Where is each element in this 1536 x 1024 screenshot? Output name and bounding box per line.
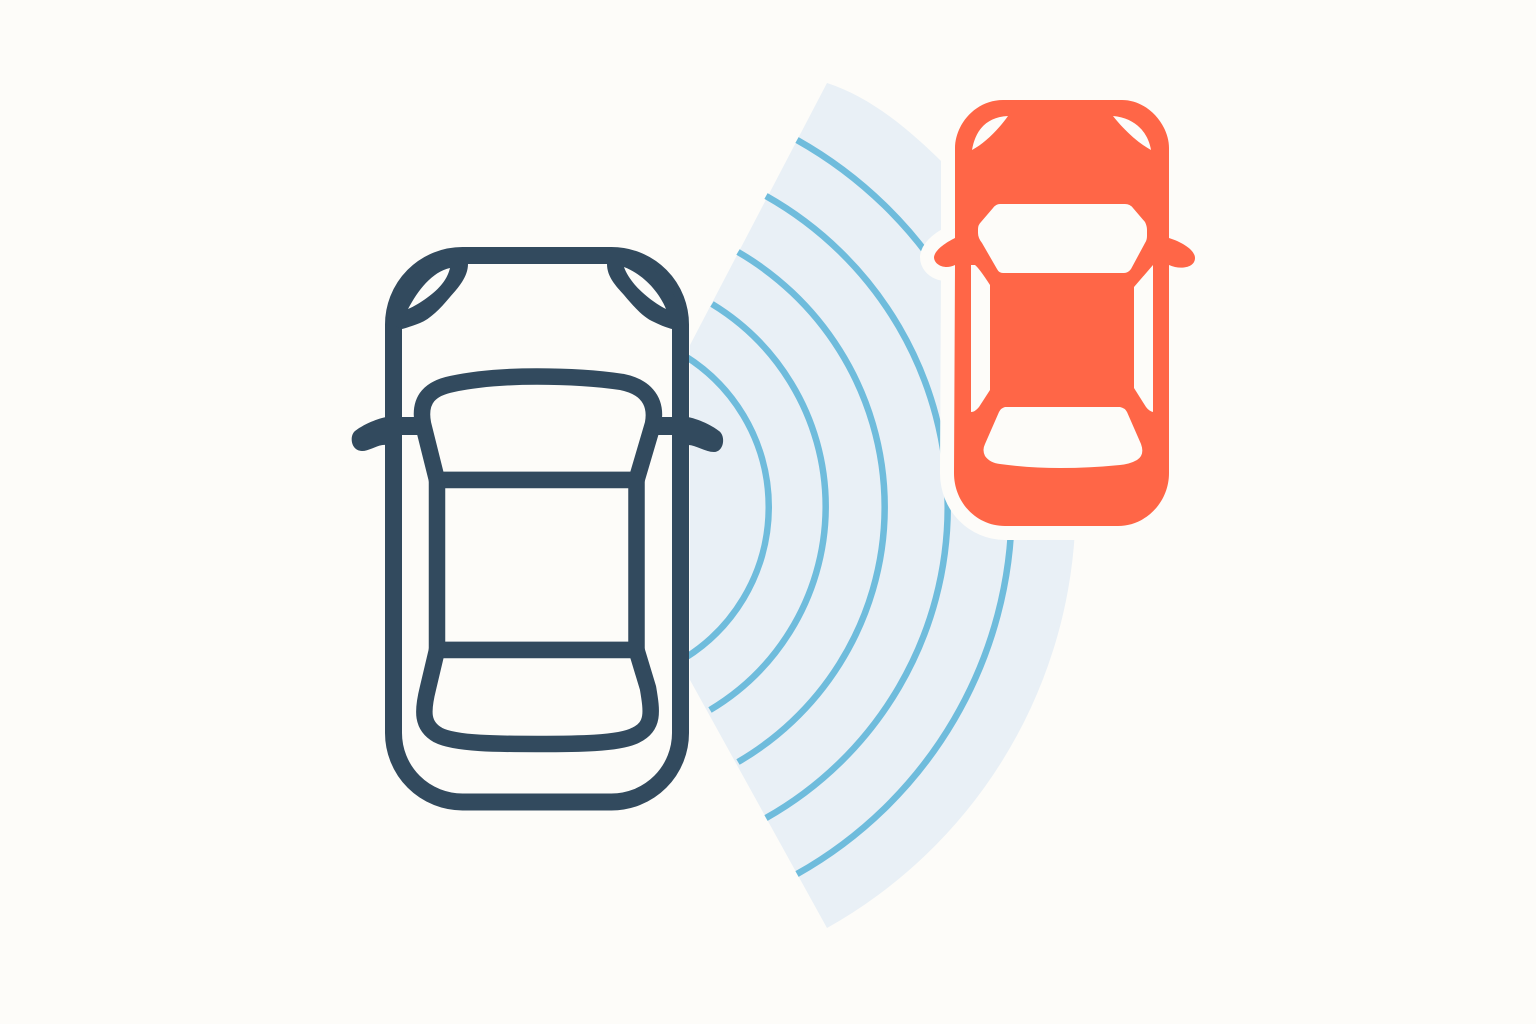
left headlight bbox=[393, 256, 468, 329]
left side window bbox=[971, 265, 990, 412]
car body outline bbox=[393, 256, 681, 802]
cabin roof bbox=[437, 480, 636, 650]
right side window bbox=[1134, 265, 1153, 412]
arc 1 bbox=[685, 356, 769, 658]
right headlight bbox=[607, 256, 681, 329]
rear window bbox=[424, 650, 651, 744]
right mirror bbox=[656, 417, 723, 452]
icon: red car bbox=[934, 100, 1195, 526]
left headlight bbox=[972, 116, 1008, 150]
icon: dark outlined car bbox=[352, 256, 723, 802]
red car body bbox=[934, 100, 1195, 526]
windshield bbox=[978, 204, 1147, 273]
arc 2 bbox=[710, 304, 826, 710]
arc 5 bbox=[797, 140, 1012, 874]
rear window bbox=[984, 407, 1142, 468]
left mirror bbox=[352, 417, 418, 451]
right headlight bbox=[1113, 116, 1151, 150]
windshield bbox=[422, 376, 654, 480]
panel: sensor coverage sector bbox=[690, 83, 1075, 928]
sensor wave arcs bbox=[685, 140, 1012, 874]
arc 3 bbox=[738, 252, 885, 762]
red car halo bbox=[934, 100, 1195, 526]
arc 4 bbox=[766, 196, 948, 818]
